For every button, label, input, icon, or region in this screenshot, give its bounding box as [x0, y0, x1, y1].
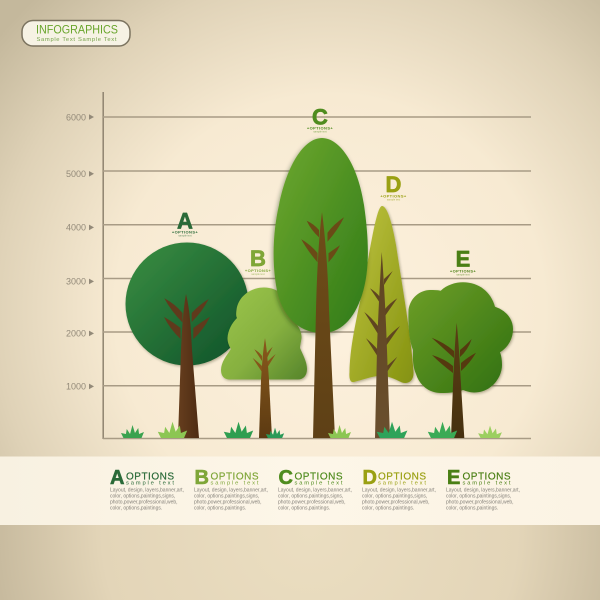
legend item B: OPTIONS	[210, 471, 259, 482]
tree label C: C	[312, 104, 328, 130]
tree label A: sample text	[178, 234, 192, 238]
tree E	[408, 282, 513, 438]
legend item B: color, options,paintings.	[194, 506, 246, 512]
y axis labels: 6000	[66, 112, 86, 122]
tree B	[221, 288, 307, 438]
legend item B: photo,power,professional,web,	[194, 500, 262, 506]
y axis labels: 4000	[66, 222, 86, 232]
legend item A: OPTIONS	[126, 471, 174, 482]
legend item A: sample text	[126, 480, 174, 486]
lower background	[0, 525, 600, 600]
tree label B: sample text	[251, 272, 265, 276]
header badge: Sample Text Sample Text	[36, 37, 117, 43]
legend item C: photo,power,professional,web,	[278, 500, 346, 506]
legend item E: Layout, design, layers,banner,art,	[446, 488, 520, 494]
chart axes and gridlines	[103, 92, 531, 439]
legend item E: sample text	[462, 480, 511, 486]
legend item D: color, options,paintings.	[362, 506, 414, 512]
tree label B	[245, 246, 271, 276]
legend item C: sample text	[294, 480, 343, 486]
legend item A	[110, 467, 184, 512]
legend item A: color, options,paintings,signs,	[110, 494, 175, 500]
legend item C: OPTIONS	[294, 471, 343, 482]
tree label D: sample text	[387, 198, 400, 202]
legend item E: photo,power,professional,web,	[446, 500, 514, 506]
y axis labels: 5000	[66, 169, 86, 179]
legend item D: color, options,paintings,signs,	[362, 494, 427, 500]
legend item A: color, options,paintings.	[110, 506, 162, 512]
legend item D: sample text	[378, 480, 426, 486]
tree label C: +OPTIONS+	[307, 126, 333, 130]
legend item C: color, options,paintings.	[278, 506, 330, 512]
tree label D	[380, 172, 407, 202]
legend item A: Layout, design, layers,banner,art,	[110, 488, 184, 494]
legend item C: Layout, design, layers,banner,art,	[278, 488, 352, 494]
tree A	[126, 242, 248, 438]
legend band	[0, 456, 600, 525]
y axis labels	[66, 112, 94, 392]
legend item B: Layout, design, layers,banner,art,	[194, 488, 268, 494]
tree label C: sample text	[313, 130, 327, 134]
legend item C	[278, 467, 352, 512]
legend item D: photo,power,professional,web,	[362, 500, 430, 506]
legend item B: color, options,paintings,signs,	[194, 494, 259, 500]
tree label D: D	[386, 172, 401, 197]
legend item C: color, options,paintings,signs,	[278, 494, 343, 500]
tree label B: +OPTIONS+	[245, 268, 271, 273]
tree label E: E	[456, 246, 470, 272]
legend item B: B	[194, 467, 209, 489]
legend item B	[194, 467, 268, 512]
legend item D: D	[362, 467, 377, 489]
legend item D	[362, 467, 436, 512]
tree label D: +OPTIONS+	[380, 194, 407, 198]
tree D	[349, 206, 414, 438]
tree label B: B	[250, 246, 266, 271]
y axis labels: 2000	[66, 328, 86, 338]
legend item E	[446, 467, 520, 512]
legend item E: color, options,paintings.	[446, 506, 498, 512]
legend item E: OPTIONS	[462, 471, 511, 482]
legend item E: E	[447, 467, 460, 489]
tree label E: +OPTIONS+	[450, 268, 476, 274]
tree C	[274, 138, 368, 438]
legend item A: photo,power,professional,web,	[110, 500, 178, 506]
tree label E	[450, 246, 476, 276]
tree label E: sample text	[456, 272, 470, 276]
header badge: INFOGRAPHICS	[36, 24, 118, 36]
legend item D: Layout, design, layers,banner,art,	[362, 488, 436, 494]
tree label A: A	[177, 208, 193, 234]
y axis labels: 1000	[66, 382, 86, 392]
grass tufts	[121, 422, 502, 438]
legend item A: A	[110, 467, 124, 489]
legend item C: C	[278, 467, 293, 489]
header badge	[22, 20, 130, 46]
y axis labels: 3000	[66, 276, 86, 286]
tree label A: +OPTIONS+	[172, 230, 198, 234]
tree label C	[307, 104, 333, 134]
legend item E: color, options,paintings,signs,	[446, 494, 511, 500]
tree label A	[172, 208, 198, 238]
legend item B: sample text	[210, 480, 259, 486]
legend item D: OPTIONS	[378, 471, 426, 482]
